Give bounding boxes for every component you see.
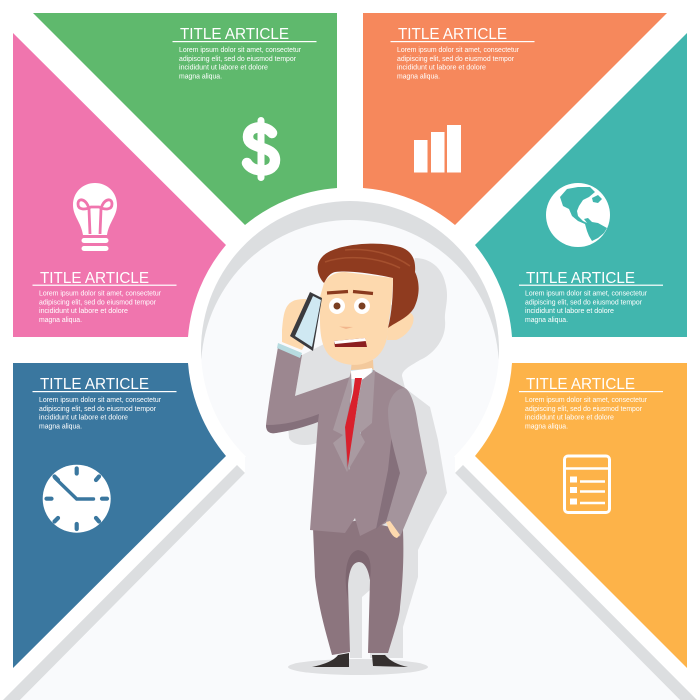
text block: yellow: adipiscing elit, sed do eiusmod tempor: [525, 406, 643, 413]
panel: teal: [475, 33, 687, 337]
hand: [282, 299, 312, 350]
icon: bar chart: [414, 125, 461, 172]
icon: globe: [546, 183, 610, 247]
text block: orange: Lorem ipsum dolor sit amet, consectetur: [397, 47, 520, 54]
shoes: [312, 653, 408, 667]
shirt: [349, 369, 373, 470]
text block: orange: adipiscing elit, sed do eiusmod tempor: [397, 56, 515, 63]
face: [320, 272, 393, 365]
eyebrows: [327, 292, 373, 294]
text block: orange: magna aliqua.: [397, 73, 440, 80]
heading: teal: TITLE ARTICLE: [526, 270, 635, 287]
ear: [387, 313, 414, 340]
text block: pink: adipiscing elit, sed do eiusmod tempor: [39, 299, 157, 306]
text block: pink: [39, 290, 162, 324]
panel: blue: [13, 363, 226, 668]
tie: [345, 378, 362, 470]
heading: pink: TITLE ARTICLE: [40, 270, 149, 287]
text block: blue: adipiscing elit, sed do eiusmod tempor: [39, 406, 157, 413]
panel: green: [33, 13, 337, 225]
text block: teal: incididunt ut labore et dolore: [525, 308, 614, 315]
text block: blue: [39, 397, 162, 430]
icon: dollar: [247, 120, 275, 178]
text block: orange: incididunt ut labore et dolore: [397, 65, 486, 72]
text block: green: [179, 47, 302, 80]
text block: yellow: Lorem ipsum dolor sit amet, consectetur: [525, 397, 648, 404]
neck: [350, 360, 374, 378]
text block: blue: incididunt ut labore et dolore: [39, 415, 128, 422]
nose: [339, 326, 353, 329]
shirt cuff: [277, 343, 302, 358]
heading: yellow: TITLE ARTICLE: [526, 376, 635, 393]
jacket: [266, 347, 405, 536]
text block: green: adipiscing elit, sed do eiusmod tempor: [179, 56, 297, 63]
panel: orange: [363, 13, 667, 225]
text block: teal: adipiscing elit, sed do eiusmod tempor: [525, 299, 643, 306]
eyes: [329, 298, 370, 314]
text block: yellow: [525, 397, 648, 430]
man's cast shadow: [288, 258, 447, 658]
heading: green: TITLE ARTICLE: [180, 26, 289, 43]
panel: pink: [13, 33, 226, 337]
text block: teal: [525, 290, 648, 324]
text block: pink: Lorem ipsum dolor sit amet, consectetur: [39, 290, 162, 298]
text block: teal: magna aliqua.: [525, 317, 568, 324]
central backdrop: [3, 201, 697, 700]
text block: green: Lorem ipsum dolor sit amet, consectetur: [179, 47, 302, 54]
text block: yellow: magna aliqua.: [525, 423, 568, 430]
icon: light bulb: [73, 183, 117, 251]
icon: checklist: [564, 456, 610, 512]
mouth: [334, 338, 367, 347]
panel: yellow: [475, 363, 687, 668]
phone: [290, 292, 322, 351]
text block: green: incididunt ut labore et dolore: [179, 65, 268, 72]
text block: orange: [397, 47, 520, 80]
icon: clock: [43, 465, 111, 533]
businessman: [266, 244, 427, 667]
right sleeve: [386, 388, 427, 537]
trousers: [313, 520, 403, 655]
heading: blue: TITLE ARTICLE: [40, 376, 149, 393]
text block: green: magna aliqua.: [179, 73, 222, 80]
floor shadow: [288, 659, 428, 675]
hand in pocket: [386, 521, 400, 538]
lapels: [333, 370, 375, 472]
text block: teal: Lorem ipsum dolor sit amet, consectetur: [525, 290, 648, 298]
text block: blue: Lorem ipsum dolor sit amet, consectetur: [39, 397, 162, 404]
text block: pink: magna aliqua.: [39, 317, 82, 324]
text block: blue: magna aliqua.: [39, 423, 82, 430]
hair: [318, 244, 419, 328]
text block: pink: incididunt ut labore et dolore: [39, 308, 128, 315]
heading: orange: TITLE ARTICLE: [398, 26, 507, 43]
text block: yellow: incididunt ut labore et dolore: [525, 415, 614, 422]
